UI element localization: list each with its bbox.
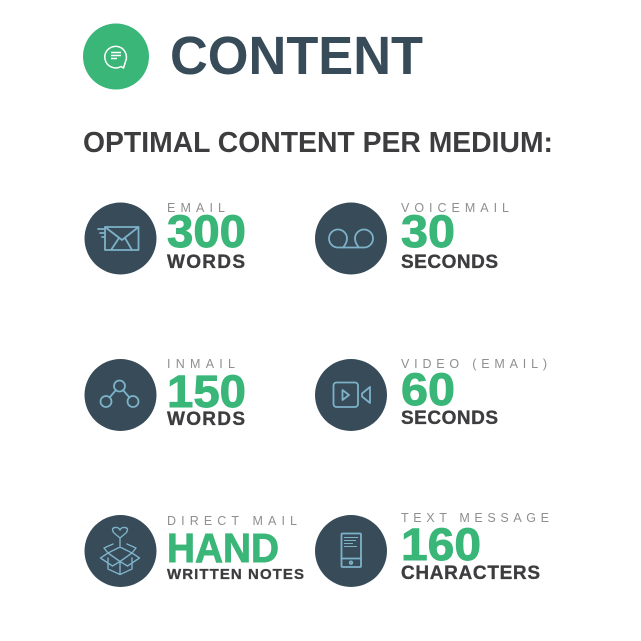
value: 300 — [167, 206, 246, 257]
label: INMAIL — [167, 357, 235, 371]
label: TEXT MESSAGE — [401, 511, 549, 525]
value: 60 — [401, 364, 455, 415]
label: DIRECT MAIL — [167, 514, 297, 528]
panel: email — [84, 201, 246, 274]
panel: video email — [315, 357, 547, 431]
value: 150 — [167, 366, 246, 417]
heading: OPTIMAL CONTENT PER MEDIUM: — [83, 127, 553, 159]
icon: envelope — [84, 202, 156, 274]
label: VOICEMAIL — [401, 201, 509, 215]
unit: SECONDS — [401, 252, 498, 273]
unit: CHARACTERS — [401, 563, 540, 584]
icon: phone — [315, 515, 387, 587]
panel: text message — [315, 511, 549, 587]
icon: gift box — [84, 515, 156, 587]
panel: voicemail — [315, 201, 509, 274]
unit: WRITTEN NOTES — [167, 566, 304, 583]
icon: video camera — [315, 359, 387, 431]
value: 160 — [401, 519, 481, 570]
unit: WORDS — [167, 409, 245, 430]
title: CONTENT — [170, 26, 423, 86]
icon: voicemail — [315, 202, 387, 274]
panel: inmail — [84, 357, 246, 431]
panel: direct mail — [84, 514, 304, 587]
label: EMAIL — [167, 201, 225, 215]
value: 30 — [401, 206, 455, 257]
unit: SECONDS — [401, 408, 498, 429]
icon: network — [84, 359, 156, 431]
value: HAND — [167, 525, 279, 571]
label: VIDEO (EMAIL) — [401, 357, 547, 371]
unit: WORDS — [167, 252, 245, 273]
icon: chat bubble — [83, 24, 149, 90]
